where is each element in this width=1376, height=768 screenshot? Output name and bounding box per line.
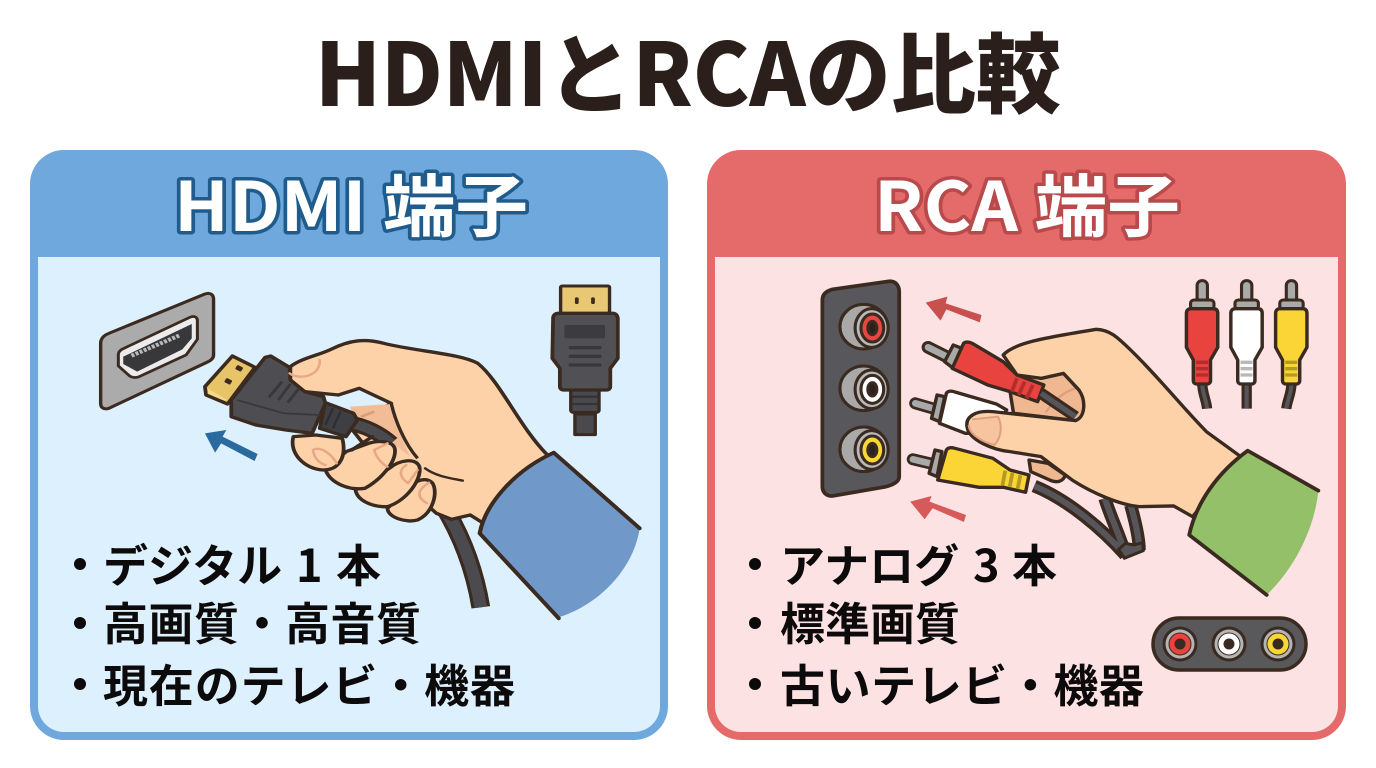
- arrow: insert bottom: [910, 496, 966, 522]
- icon: hand: [967, 329, 1241, 517]
- list: HDMI features: [74, 530, 515, 715]
- icon: RCA cables: [1034, 486, 1143, 558]
- icon: three RCA plugs: [1186, 281, 1307, 409]
- list: RCA features: 古いテレビ・機器: [780, 650, 1144, 715]
- heading: RCA 端子: RCA 端子: [874, 152, 1180, 251]
- list: HDMI features: 現在のテレビ・機器: [103, 650, 515, 715]
- icon: thumbnail: [969, 417, 1001, 445]
- icon: back fingers: [1007, 370, 1085, 482]
- list: RCA features: [749, 530, 1144, 715]
- list: HDMI features: 1: [296, 530, 323, 595]
- icon: blue sleeve: [480, 453, 640, 618]
- illustration: HDMI hand and plug: [101, 286, 640, 618]
- list: HDMI features: デジタル: [103, 530, 282, 595]
- icon: palm shadow: [350, 404, 410, 457]
- arrow: insert HDMI: [205, 430, 258, 461]
- list: RCA features: 3: [973, 530, 1000, 595]
- icon: HDMI wall port: [101, 293, 214, 409]
- list: HDMI features: 本: [336, 530, 381, 595]
- icon: HDMI gold connector: [205, 356, 255, 404]
- icon: hand palm: [290, 341, 547, 523]
- icon: HDMI cable lower: [433, 490, 481, 607]
- icon: RCA horizontal jack strip: [1153, 618, 1306, 670]
- panel: RCA: [707, 150, 1346, 740]
- icon: HDMI plug front view: [552, 286, 618, 435]
- list: HDMI features: 高画質・高音質: [103, 588, 421, 653]
- title: HDMIとRCAの比較: [315, 6, 1061, 132]
- illustration: RCA hand and plugs: [822, 281, 1318, 595]
- icon: red plug: [928, 342, 1076, 417]
- icon: white plug: [915, 391, 1007, 433]
- icon: HDMI plug body: [231, 356, 391, 443]
- icon: RCA jack panel: [822, 281, 899, 496]
- panel: HDMI: [30, 150, 668, 740]
- list: RCA features: 本: [1012, 530, 1057, 595]
- arrow: insert top: [926, 297, 981, 322]
- icon: fingers: [290, 360, 463, 521]
- icon: green sleeve: [1189, 451, 1318, 595]
- list: RCA features: アナログ: [780, 530, 959, 595]
- heading: HDMI 端子: HDMI 端子: [174, 152, 528, 251]
- icon: yellow plug: [913, 448, 1029, 492]
- list: RCA features: 標準画質: [780, 588, 960, 653]
